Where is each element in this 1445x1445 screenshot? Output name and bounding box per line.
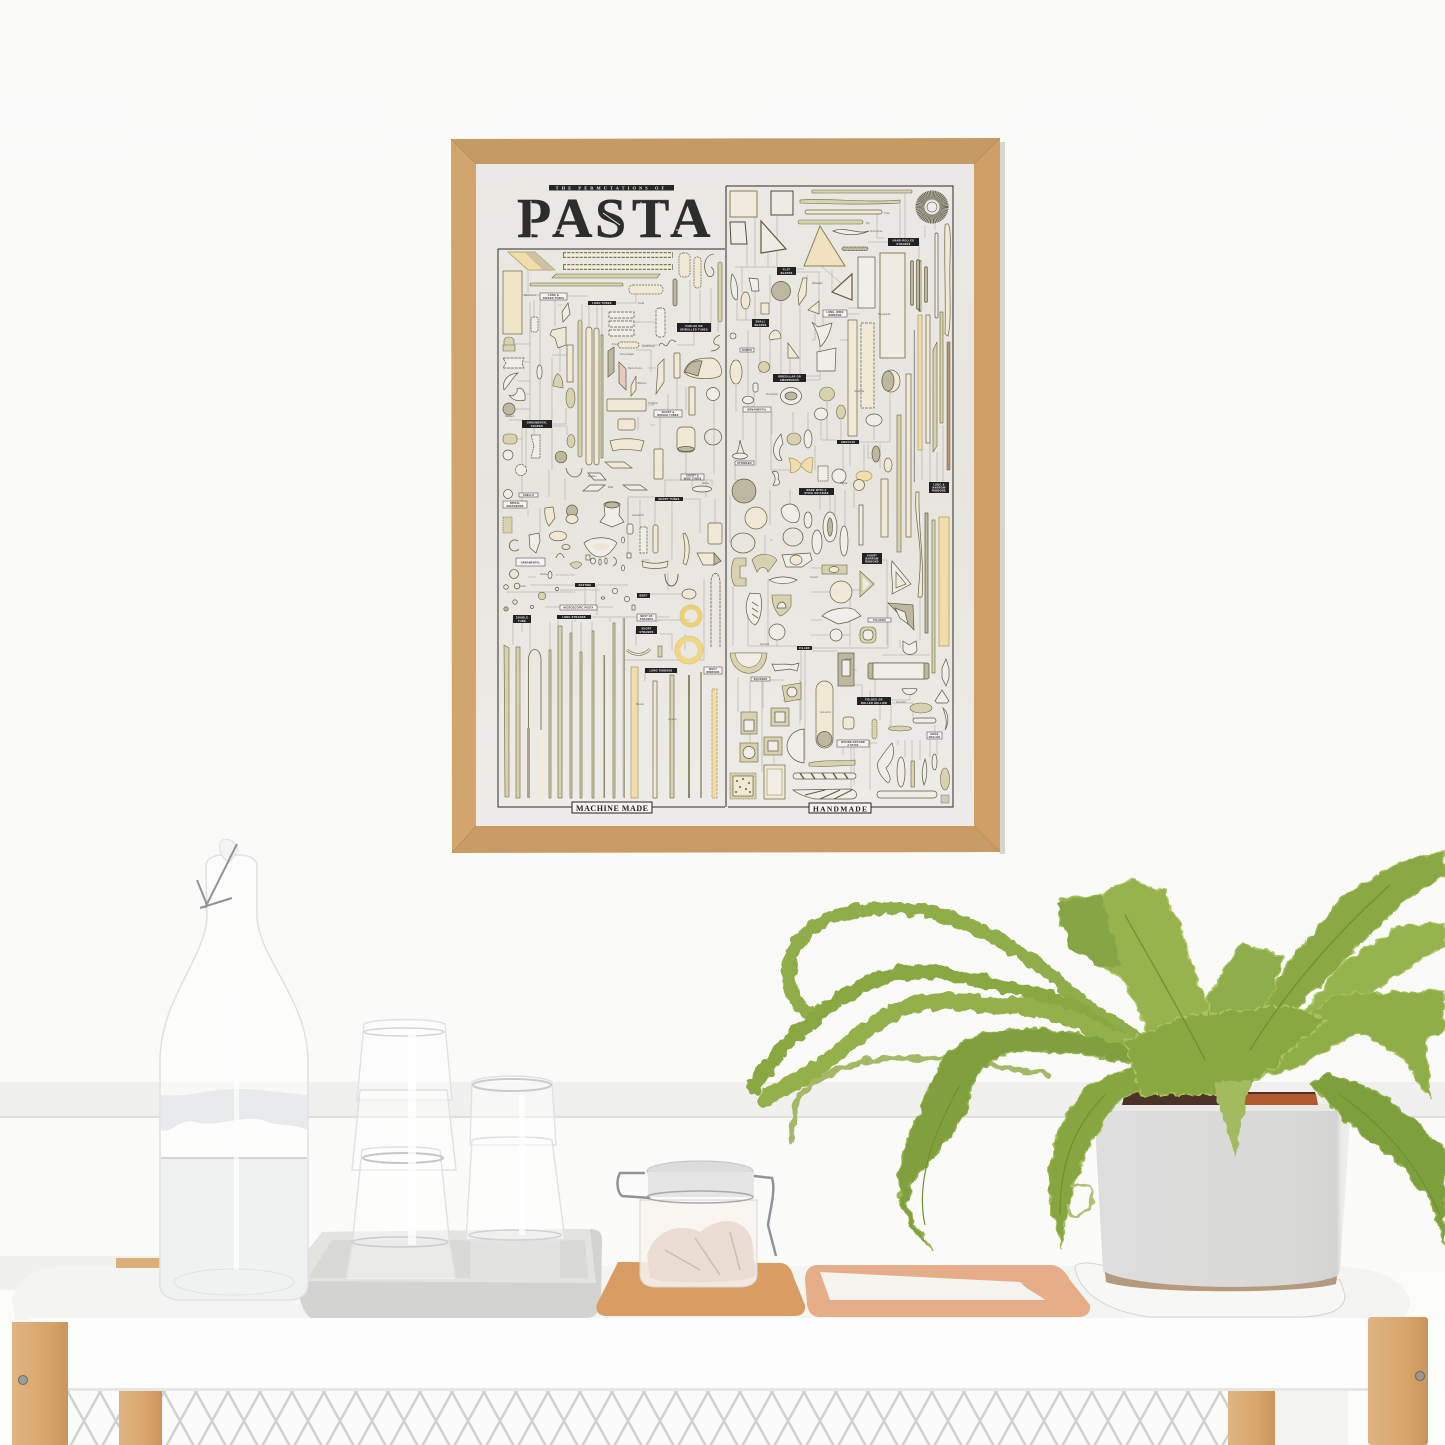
nests of strands <box>675 605 703 664</box>
handmade category tags: RIBBONS <box>865 560 879 564</box>
pasta name captions: Orecchiette <box>766 393 778 396</box>
handmade category tags: FLAT <box>783 268 790 272</box>
handmade category tags: LONG & <box>933 484 945 486</box>
handmade pasta shapes: filled and folded <box>730 653 950 803</box>
handmade label: HANDMADE <box>813 804 867 814</box>
pasta name captions: Pici <box>866 223 870 225</box>
machine made category tags: STRANDS <box>639 631 654 634</box>
metal tray <box>286 1229 602 1318</box>
handmade category tags: FILLED <box>799 647 810 650</box>
pasta name captions: Bavette <box>636 703 645 706</box>
machine made panel border <box>498 249 725 807</box>
handmade category tags: ORNAMENTAL <box>747 408 767 412</box>
pasta name captions: Penne Rigate <box>620 353 635 356</box>
machine made label: MACHINE MADE <box>576 804 648 813</box>
machine made category tags: SHORT TUBES <box>658 498 680 501</box>
handmade category tags: NARROW <box>932 486 946 490</box>
handmade category tags: SQUARES <box>754 678 768 681</box>
machine made pasta shapes: ornamental <box>503 337 712 498</box>
handmade category tags: NARROW <box>865 558 879 560</box>
plant: leaf midribs <box>922 885 1440 1225</box>
leaf: top arching frond <box>789 908 1170 1060</box>
machine made category tags: BENT <box>639 594 648 598</box>
leaf: back left folded <box>1058 895 1120 968</box>
handmade category tags: SHAPES <box>780 272 793 275</box>
long strands and ribbons <box>504 573 720 798</box>
pasta name captions: Fusilli <box>638 303 644 305</box>
plant: fern leaves <box>754 850 1445 1248</box>
machine made category tags: SHELLS <box>523 494 534 497</box>
connector lines <box>506 193 943 797</box>
handmade category tags: STRINGED <box>737 462 752 465</box>
picture frame <box>451 138 1005 854</box>
leaf: second frond <box>754 972 1147 1087</box>
handmade category tags: HAND-ROLLED <box>893 240 914 242</box>
mesh panel <box>68 1391 1228 1445</box>
handmade category tags: DUMPS <box>742 349 752 352</box>
leaf: rear middle <box>1205 945 1282 1060</box>
pasta name captions: Ditali <box>608 486 614 489</box>
machine made category tags: WIDE TUBES <box>684 477 701 480</box>
handmade category tags: RIBBONS <box>932 490 946 492</box>
handmade panel border <box>726 186 953 807</box>
handmade category tags: WOUND AROUND <box>841 741 865 744</box>
pasta name captions: Trofie <box>884 212 891 215</box>
machine made pasta shapes: long tubes and sheets <box>503 252 722 479</box>
machine made category tags: RIBBONS <box>707 671 720 674</box>
machine made category tags: SHAPES <box>531 425 543 428</box>
pasta name captions: Sorrentini <box>896 701 906 704</box>
leaf: central base rosette <box>1125 1005 1325 1095</box>
machine made category tags <box>503 293 722 674</box>
leaf: central front droop <box>1049 1062 1195 1248</box>
plant pot <box>1093 1092 1355 1291</box>
machine made category tags: RIDGED TUBES <box>657 414 679 417</box>
pasta name captions: Maltagliati <box>812 282 823 285</box>
poster sheet <box>476 164 974 826</box>
machine made pasta shapes: short tubes and pastine <box>503 502 722 611</box>
handmade category tags: LONG, WIDE <box>826 311 844 314</box>
machine made category tags: SHORT & <box>686 474 699 478</box>
handmade category tags: ROLLED HOLLOW <box>861 702 887 705</box>
handmade category tags: SHAPES <box>754 324 767 327</box>
pasta name captions: Linguine <box>668 719 677 721</box>
pasta name captions: Tagliatelle <box>854 390 865 393</box>
pasta name captions: Pennoni <box>638 383 647 385</box>
pasta name captions: Agnolotti <box>760 643 769 646</box>
handmade category tags: AMORPHOUS <box>780 379 799 382</box>
pasta name captions: Tortiglioni <box>648 402 658 405</box>
handmade category tags: STRANDS <box>896 243 911 246</box>
pasta name captions: Radiatori <box>505 415 515 418</box>
pasta name captions: Pappardelle <box>878 313 891 316</box>
handmade pasta shapes: gnocchi, knife and fan shapes <box>731 430 949 673</box>
pasta name captions <box>505 212 906 721</box>
machine made category tags: STRANDS <box>640 618 653 621</box>
stacked glasses, left <box>346 1020 456 1280</box>
pasta name captions: Corzetti <box>810 576 818 579</box>
pasta name captions: Cannolicchi <box>632 515 644 517</box>
handmade category tags: PILLOWS <box>873 619 886 622</box>
machine made category tags: ORNAMENTAL <box>527 422 547 424</box>
handmade category tags: SMALL <box>755 320 766 324</box>
pasta name captions: Anelli <box>520 585 526 588</box>
leaf: right tall frond <box>1215 850 1445 1075</box>
leaf: curled tip <box>1066 1185 1093 1215</box>
pasta name captions: Stelline <box>540 573 548 576</box>
machine made category tags: MICROSCOPIC PASTA <box>563 606 594 610</box>
machine made category tags: ORNAMENTAL <box>521 562 541 564</box>
pasta name captions: Mezze Penne <box>628 368 643 370</box>
pasta name captions: Strozzapreti <box>870 230 883 233</box>
handmade category tags: MADE WITH A <box>806 489 827 492</box>
pasta name captions: Elbows <box>702 483 710 485</box>
terracotta tray with paper <box>805 1265 1090 1317</box>
pasta name captions: Penne <box>612 344 619 346</box>
machine made category tags: LONG TUBES <box>592 302 612 305</box>
handmade category tags: A STICK <box>847 744 859 747</box>
pasta name captions: Fusilli Bucati <box>642 345 655 348</box>
leaf: small central droop <box>1212 1080 1252 1158</box>
machine made category tags: CURLED OR <box>685 325 703 328</box>
handmade category tags: IRREGULAR OR <box>778 376 801 378</box>
handmade category tags: RIBBONS <box>829 314 842 317</box>
handmade category tags: FOLDED OR <box>865 698 883 702</box>
wall rail <box>0 1082 1445 1290</box>
handmade category tags: SHORT <box>867 554 877 558</box>
leaf: right third frond <box>1220 990 1445 1100</box>
machine made category tags: SPIRALLED TUBES <box>680 328 708 332</box>
pasta name captions: Cannelloni <box>820 712 831 714</box>
machine made category tags: RIDGED TUBES <box>543 297 564 300</box>
pasta name captions: Ravioli <box>845 659 852 661</box>
handmade category tags: STICK OR KNIFE <box>804 492 829 495</box>
pasta name captions: Maccheroni <box>524 294 536 297</box>
machine made category tags: TUBE <box>518 620 526 623</box>
stacked glasses, right <box>466 1076 565 1278</box>
leaf: right second frond <box>1265 925 1445 1075</box>
table: top surface and front rail <box>12 1258 1410 1391</box>
handmade pasta shapes: flat shapes and strands <box>730 190 950 552</box>
leaf: third frond <box>765 1001 1169 1099</box>
machine made category tags: WAVY <box>709 668 717 671</box>
machine made category tags: LONG STRANDS <box>562 616 586 619</box>
table legs <box>12 1317 1428 1445</box>
poster title banner: THE PERMUTATIONS OF <box>556 185 667 190</box>
machine made category tags: SHEPHERDS <box>506 505 524 508</box>
machine made category tags: SHORT <box>641 628 652 630</box>
handmade category tags: GNOCCHI <box>841 441 855 444</box>
machine made category tags: SHORT & <box>662 411 674 414</box>
plant saucer <box>1075 1263 1345 1317</box>
machine made category tags: NEST OF <box>640 615 653 618</box>
machine made category tags: LONG & <box>548 294 559 297</box>
pasta name captions: Rigatoni <box>588 475 597 478</box>
poster title PASTA: PASTA <box>517 188 711 250</box>
glass bottle <box>160 839 308 1300</box>
machine made category tags: LONG RIBBONS <box>649 670 673 672</box>
machine made category tags: SPIRAL <box>510 502 520 505</box>
machine made category tags: PASTINE <box>579 584 591 587</box>
handmade category tags <box>735 238 949 747</box>
pasta name captions: Farfalle <box>840 482 848 485</box>
handmade category tags: ROLLED <box>929 736 940 739</box>
machine made category tags: DOUBLE <box>516 616 528 620</box>
wooden board <box>596 1262 805 1316</box>
handmade category tags: EDGE <box>931 733 939 736</box>
storage jar <box>618 1161 776 1287</box>
leaf: upright main <box>1060 880 1222 1075</box>
leaf: wide drooping left <box>898 1028 1190 1248</box>
leaf: thin drooping frond <box>793 1058 1050 1141</box>
leaf: right drooping <box>1310 1072 1445 1245</box>
